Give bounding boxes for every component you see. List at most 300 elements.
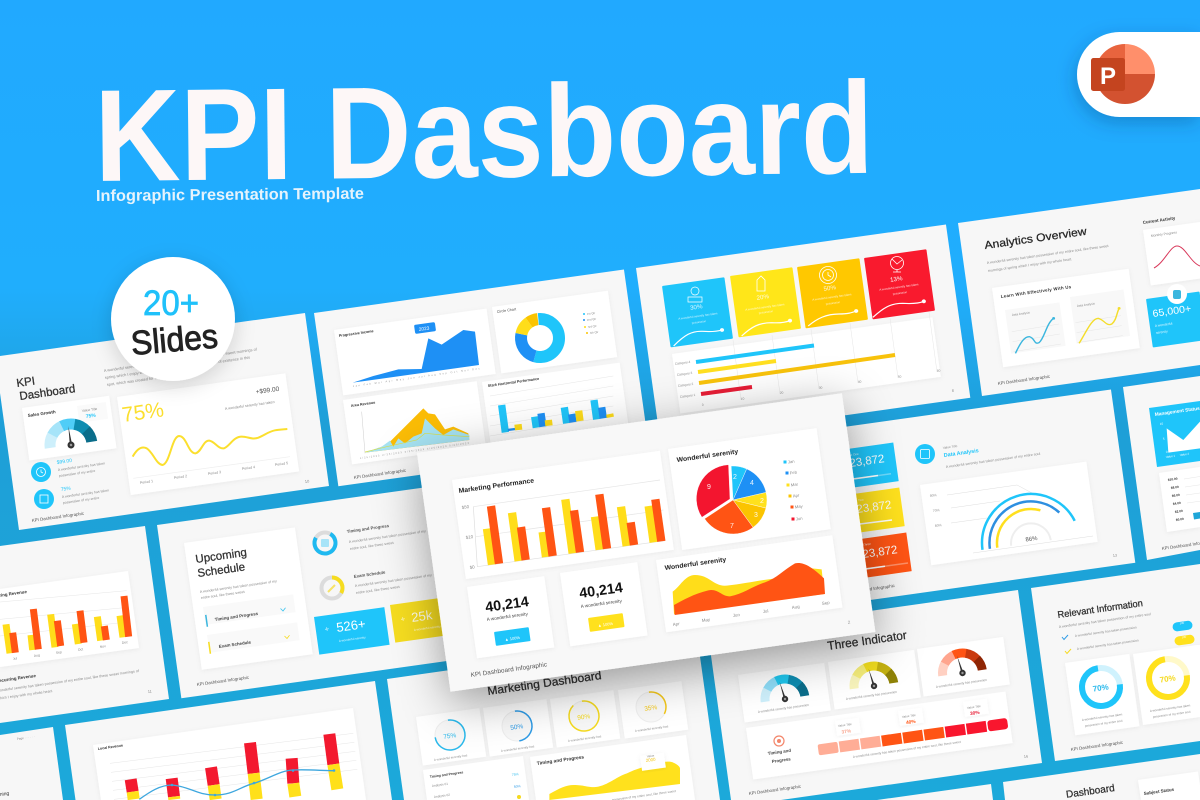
card: 13%: A wonderful serenity has taken: [879, 282, 919, 292]
slide: lower partial right: Subject Status: [1143, 787, 1175, 796]
panel: bar list: $2.00: [1175, 509, 1183, 514]
card: 65,000+: [1146, 284, 1200, 348]
card: 50%: possession: [825, 300, 841, 306]
card: 526+: [314, 607, 390, 655]
kpi ring 50%: A wonderful serenity has: [501, 744, 535, 753]
panel: sales growth: Sales Growth: [27, 409, 56, 418]
panel: progress table: Timing and Progress: [430, 770, 464, 779]
panel: schedule list: Schedule: [197, 561, 246, 580]
stat card: yellow: ▲ 100%: [597, 621, 614, 628]
slide: main marketing performance: [417, 393, 875, 692]
panel: pie chart: Wonderful serenity: [676, 448, 739, 464]
panel: pie chart: [668, 428, 831, 550]
stat card: yellow: 40,214: [578, 580, 624, 602]
page number: 13: [1113, 553, 1117, 558]
panel: horizontal bar chart: 40: [858, 380, 862, 384]
card: cyan donut: [1065, 654, 1140, 735]
footer: KPI Dashboard Infographic: [196, 675, 250, 687]
legend: [583, 311, 599, 335]
checklist: A wonderful serenity has taken possession: [1075, 625, 1137, 638]
text: $99.00: A wonderful serenity has taken: [58, 461, 105, 472]
text: $99.00: possession of my entire: [59, 469, 96, 478]
panel: horizontal bar chart: Category 3: [677, 371, 693, 377]
kpi ring 75%: A wonderful serenity has: [434, 753, 468, 762]
tooltip: [414, 322, 436, 334]
card: yellow donut: possession of my entire soul: [1153, 710, 1191, 719]
panel: bar list: $0.00: [1176, 517, 1184, 522]
card: 30%: [662, 277, 733, 347]
panel: line chart: 75%: [120, 398, 165, 427]
gauge card: red: [917, 637, 1010, 697]
text: exam schedule: entire soul, like these sweet: [356, 585, 400, 595]
card: 30%: possession: [691, 319, 707, 325]
panel: horizontal bar chart: 0: [702, 403, 704, 407]
panel: horizontal bar chart: 50: [898, 375, 902, 379]
panel: monthly progress: Monthly Progress: [1151, 230, 1178, 238]
card: cyan 23,872: [819, 443, 899, 492]
card: 50%: [797, 258, 868, 328]
panel: segmented progress: Timing and: [767, 748, 792, 756]
page number: 10: [304, 478, 310, 484]
callout: 30%: [963, 699, 989, 717]
gauge card: yellow: [828, 650, 921, 710]
panel: radial chart: 80%: [930, 493, 937, 498]
page number: 16: [1024, 754, 1028, 759]
panel: line chart: Period 2: [174, 474, 187, 480]
slide: upcoming schedule: [157, 481, 491, 698]
slide: local revenue: [65, 681, 392, 800]
page number: 2: [847, 620, 851, 625]
heading: Three Indicator: [826, 628, 908, 653]
icon: clipboard circle: [34, 489, 54, 509]
slide: relevant information: [1031, 564, 1200, 761]
slide: marketing dashboard: [387, 635, 720, 800]
slide: lower left partial: Page · · · · · ·: [17, 735, 35, 741]
panel: cyan area chart: 10: [1160, 422, 1164, 426]
badge: 20+ slides: [111, 257, 235, 381]
panel: cyan area chart: 5: [1163, 437, 1165, 441]
card: 20%: A wonderful serenity has taken: [745, 302, 785, 312]
panel: pie chart: 4: [750, 480, 754, 487]
card: cyan donut: possession of my entire soul: [1085, 719, 1123, 728]
panel: schedule list: Upcoming: [195, 547, 248, 566]
panel: area revenue: Area Revenue: [351, 401, 376, 408]
panel: bar chart: Nov: [100, 644, 106, 649]
text: $99.00: $99.00: [56, 458, 73, 466]
stat card: cyan: ▲ 100%: [504, 635, 521, 642]
panel: radial chart: 86%: [1025, 536, 1039, 544]
area chart: [353, 330, 479, 383]
panel: bar chart: Aug: [34, 653, 40, 658]
panel: area chart: Apr: [672, 621, 680, 627]
heading: KPI Dashboard: KPI: [16, 376, 36, 390]
footer: KPI Dashboard Infographic: [470, 661, 548, 679]
panel: bar chart: Sep: [56, 650, 62, 655]
text: $99.00: [56, 458, 105, 478]
text: data analysis: Value Title: [943, 444, 958, 450]
description text: spot, which was created for the bliss of souls like mine.: [106, 369, 201, 387]
legend: May: [794, 503, 804, 509]
panel: schedule list: Exam Schedule: [218, 639, 252, 649]
card: 30%: 30%: [690, 303, 703, 312]
stacked areas: [673, 563, 825, 615]
panel: pie chart: 9: [707, 484, 711, 491]
card: 65,000+: A wonderful: [1155, 322, 1173, 328]
slide: lower partial right: [1003, 754, 1200, 800]
legend: Apr: [792, 493, 800, 498]
text: 75%: 75%: [60, 486, 72, 493]
panel: area revenue: 1/25/2023 2/25/2023 3/25/2023 4/25/2023 5/25/2023: [360, 442, 470, 460]
card: 20%: [730, 267, 801, 337]
slide: colored KPI cards: [636, 224, 970, 441]
panel: line chart: Period 4: [242, 465, 255, 471]
footer: KPI Dashboard Infographic: [748, 784, 802, 796]
panel: stacked bar chart: [93, 708, 366, 800]
card: yellow donut: [1133, 645, 1200, 725]
panel: sales growth: Value Title: [82, 407, 98, 413]
stacked area chart: [362, 408, 469, 453]
panel: bar list: $6.00: [1172, 493, 1180, 498]
kpi ring 90%: [550, 690, 620, 748]
card: 526+: A wonderful serenity: [339, 635, 366, 643]
callout: 37%: 37%: [841, 728, 852, 736]
panel: horizontal bar chart: Category 2: [678, 382, 694, 388]
badge: 20+ slides: 20+: [143, 284, 199, 323]
description text: [103, 346, 258, 387]
pill: yellow: 100: [1181, 635, 1187, 639]
panel: segmented progress: Progress: [771, 756, 792, 764]
legend: Jun: [795, 516, 803, 521]
legend: 2nd Qtr: [587, 317, 596, 322]
gauge card: blue: A wonderful serenity has possession: [758, 703, 809, 714]
panel: horizontal bar chart: 20: [780, 391, 784, 395]
legend: [784, 459, 804, 521]
card: cyan 23,872: Value One: [845, 452, 859, 458]
text: data analysis: Data Analysis: [943, 448, 979, 459]
panel: line chart: +$99.00: [255, 386, 280, 396]
panel: sales growth: 75%: [85, 413, 97, 420]
pill: cyan: 100: [1179, 621, 1185, 625]
description text: spring which I enjoy with my whole heart. I am alone, in the charm of existence in this: [104, 355, 250, 380]
panel: line chart: Period 5: [275, 461, 288, 467]
panel: cyan area chart: Management Status: [1154, 406, 1200, 418]
legend: 1st Qtr: [587, 311, 596, 316]
kpi ring 50%: [483, 699, 553, 757]
panel: learn with us: Data Analysis: [1012, 310, 1031, 317]
card: 25k: +: [400, 614, 406, 624]
panel: horizontal bar chart: Category 4: [675, 360, 691, 366]
footer: KPI Dashboard Infographic: [31, 511, 85, 523]
subtitle: Infographic Presentation Template: [96, 186, 364, 205]
panel: pie chart: 3: [754, 512, 758, 519]
page number: 8: [952, 389, 954, 393]
pill: cyan: [1172, 620, 1193, 632]
badge: 20+ slides: Slides: [129, 318, 219, 363]
card: 526+: 526+: [335, 616, 366, 635]
slide: data analysis: [801, 389, 1135, 606]
card: 25k: 25k: [410, 607, 434, 625]
panel: bar chart: Dec: [122, 640, 128, 645]
panel: line chart: Period 1: [140, 479, 153, 485]
legend: Mar: [790, 481, 799, 487]
panel: learn with us: Data Analysis: [1077, 301, 1096, 308]
card: 50%: A wonderful serenity has taken: [812, 292, 852, 302]
text: 75%: possession of my entire: [63, 496, 100, 505]
footer: KPI Dashboard Infographic: [997, 374, 1051, 386]
powerpoint badge: [1077, 32, 1200, 117]
panel: pie chart: 7: [730, 523, 734, 530]
card: yellow 23,872: [825, 488, 905, 537]
panel: area chart: Aug: [791, 604, 800, 610]
callout: 40%: [898, 708, 924, 726]
checklist: [1062, 625, 1139, 654]
callout: 37%: [835, 718, 861, 736]
callout: 40%: Value Title: [902, 713, 916, 719]
legend: 3rd Qtr: [588, 324, 597, 329]
heading: Marketing Dashboard: [487, 670, 602, 698]
card: cyan 23,872: 23,872: [849, 453, 885, 470]
panel: schedule list: [184, 527, 313, 670]
panel: progress table: [423, 756, 529, 800]
checklist: A wonderful serenity has taken possession: [1077, 638, 1139, 651]
panel: progressive income: [334, 309, 496, 395]
pill: yellow: [1174, 634, 1195, 646]
gauge: [47, 421, 92, 451]
panel: schedule list: Timing and Progress: [214, 611, 259, 622]
panel: schedule list: A wonderful serenity has taken possession of my: [200, 579, 277, 594]
card: orange 23,872: 23,872: [862, 544, 898, 561]
panel: bar chart: [0, 571, 139, 667]
panel: marketing performance: $0: [469, 564, 476, 570]
panel: area chart: Jul: [762, 608, 769, 614]
card: 50%: 50%: [823, 284, 837, 293]
heading: KPI Dashboard: Dashboard: [19, 383, 76, 403]
panel: marketing performance: [452, 451, 674, 579]
card: 25k: [390, 595, 466, 643]
text: data analysis: A wonderful serenity has taken possession of my entire soul: [946, 452, 1041, 469]
kpi ring 50%: 50%: [510, 723, 524, 732]
panel: area chart: [656, 535, 842, 632]
kpi ring 35%: [618, 681, 688, 739]
bar chart: [490, 376, 613, 436]
description: A wonderful serenity has taken possession of my entire soul, like these sweet: [987, 244, 1109, 265]
heading: Analytics Overview: [984, 226, 1087, 252]
stat card: yellow: A wonderful serenity: [580, 598, 623, 609]
panel: cyan area chart: Value 2: [1180, 452, 1190, 457]
panel: cyan area chart: [1149, 401, 1200, 467]
card: 526+: +: [324, 624, 330, 634]
panel: pie chart: 2: [733, 474, 737, 481]
text: timing and progress: [346, 523, 426, 551]
panel: bar list: [1159, 467, 1200, 532]
slide: analytics overview: [958, 189, 1200, 396]
panel: sales growth: [22, 396, 117, 460]
text: exam schedule: Exam Schedule: [353, 570, 386, 579]
segments: [818, 718, 1008, 755]
panel: bar list: $4.00: [1173, 501, 1181, 506]
card: 13%: 13%: [890, 275, 903, 284]
kpi ring 90%: A wonderful serenity has: [568, 734, 602, 743]
panel: bar list: $10.00: [1168, 477, 1178, 482]
panel: horizontal bar chart: Category 1: [680, 393, 696, 399]
panel: progress table: Analysis 01: [432, 782, 449, 788]
slide: management status: [1123, 376, 1200, 560]
panel: progressive income: Jan Feb Mar Apr May Jun Jul Aug Sep Oct Nov Dec: [353, 367, 481, 388]
panel: line chart: [117, 373, 299, 495]
card: orange 23,872: [832, 533, 912, 582]
donut: timing and progress: [311, 529, 339, 557]
gauge card: blue: [738, 663, 831, 723]
stat card: cyan: 40,214: [484, 594, 530, 616]
card: 13%: possession: [892, 290, 908, 296]
stat card: yellow: [560, 562, 648, 646]
panel: circle chart: Circle Chart: [497, 307, 516, 314]
line: yellow trend: [133, 429, 287, 465]
card: yellow donut: A wonderful serenity has taken: [1150, 703, 1191, 713]
legend: Jan: [787, 459, 795, 464]
panel: stark horizontal performance: Stark Horizontal Performance: [488, 377, 539, 388]
icon: calendar circle: [915, 444, 935, 464]
panel: radial chart: 60%: [935, 523, 942, 528]
panel: area chart: Jun: [732, 612, 741, 618]
text: 75%: [60, 486, 109, 505]
powerpoint badge: P: [1100, 63, 1116, 90]
card: 13%: [864, 249, 935, 319]
kpi ring 90%: 90%: [577, 713, 591, 722]
tooltip: 2023: [418, 326, 430, 333]
mini line charts: [1012, 307, 1123, 353]
panel: area revenue: [343, 381, 486, 464]
heading: current activity: Current Activity: [1142, 215, 1176, 225]
footer: KPI Dashboard Infographic: [353, 468, 407, 480]
description: A wonderful serenity has taken possession of my entire soul: [1059, 612, 1151, 629]
card: 30%: A wonderful serenity has taken: [678, 311, 718, 321]
heading: Relevant Information: [1057, 598, 1144, 621]
bar chart: [473, 480, 665, 567]
callout: 30%: 30%: [970, 710, 981, 717]
card: yellow 23,872: 23,872: [856, 499, 892, 516]
card: 65,000+: 65,000+: [1152, 304, 1192, 320]
stat card: cyan: [467, 576, 554, 658]
panel: progress table: 50%: [514, 784, 521, 789]
card: cyan donut: 70%: [1092, 682, 1109, 694]
panel: segmented progress: [746, 692, 1013, 779]
panel: schedule list: entire soul, like these sweet: [201, 590, 245, 600]
icon: target: [774, 736, 784, 746]
panel: area chart: May: [701, 617, 711, 623]
text: exam schedule: A wonderful serenity has taken possession of my: [355, 573, 432, 588]
panel: line chart: Period 3: [208, 470, 221, 476]
panel: area chart: Sep: [821, 600, 830, 606]
text: timing and progress: A wonderful serenity has taken possession of my: [349, 529, 426, 544]
panel: horizontal bar chart: 60: [937, 369, 941, 373]
panel: stacked bar chart: Local Revenue: [98, 743, 123, 751]
callout: 37%: Value Title: [838, 722, 852, 728]
legend: 4th Qtr: [590, 330, 599, 335]
panel: marketing performance: Marketing Performance: [458, 477, 535, 495]
donut chart: [519, 317, 561, 359]
text: timing and progress: entire soul, like these sweet: [350, 541, 394, 551]
panel: timing area chart: 2000: [645, 757, 656, 763]
gauge card: red: A wonderful serenity has possession: [936, 678, 987, 689]
panel: learn with us: Learn With Effectively With Us: [1000, 284, 1072, 299]
panel: area chart: Wonderful serenity: [664, 556, 727, 572]
panel: circle chart: [492, 291, 617, 373]
text: exam schedule: [353, 570, 432, 595]
text: data analysis: [943, 444, 1041, 469]
panel: radial chart: 70%: [933, 508, 940, 513]
slide: three indicator: [708, 590, 1042, 800]
panel: horizontal bar chart: 10: [741, 397, 745, 401]
panel: monthly progress: [1143, 221, 1200, 285]
kpi ring 75%: [416, 708, 486, 766]
sparklines: [674, 300, 925, 346]
slide: KPI dashboard: [0, 313, 329, 530]
callout: 30%: Value Title: [967, 704, 981, 710]
page number: 11: [148, 689, 152, 694]
panel: line chart: A wonderful serenity has taken: [225, 400, 275, 411]
panel: segmented progress: A wonderful serenity has taken possession of my entire soul, like these sweet: [853, 740, 961, 759]
donut: exam schedule: [322, 578, 342, 598]
icon: clock circle: [31, 462, 51, 482]
panel: learn with us: [992, 269, 1140, 367]
card: 20%: 20%: [756, 293, 770, 302]
text: 75%: A wonderful serenity has taken: [62, 488, 109, 499]
panel: radial chart: [920, 462, 1098, 565]
panel: bar chart: Jul: [13, 656, 18, 661]
callout: 40%: 40%: [906, 719, 917, 726]
slide: lower partial middle: [877, 784, 993, 800]
panel: progress table: 75%: [512, 772, 519, 777]
kpi ring 75%: 75%: [443, 732, 457, 741]
card: 25k: A wonderful serenity: [414, 624, 441, 632]
line: trend: [139, 770, 334, 799]
kpi ring 35%: 35%: [644, 704, 658, 713]
slide: charts overview: [314, 269, 648, 486]
description: mornings of spring which I enjoy with my whole heart.: [988, 257, 1072, 273]
panel: progressive income: Progressive Income: [339, 329, 374, 338]
panel: timing area chart: Timing and Progress: [536, 754, 585, 767]
card: 65,000+: serenity: [1156, 329, 1168, 335]
gauge card: yellow: A wonderful serenity has possession: [846, 690, 897, 701]
legend: Feb: [789, 469, 798, 475]
panel: timing area chart: Value: [647, 753, 655, 758]
panel: pie chart: 2: [760, 498, 764, 505]
panel: horizontal bar chart: 30: [819, 386, 823, 390]
card: orange 23,872: Value Three: [855, 542, 871, 548]
stat card: cyan: A wonderful serenity: [486, 611, 529, 622]
pie: [696, 465, 767, 534]
slide: lower left partial: [0, 727, 63, 800]
footer: KPI Dashboard Infographic: [1070, 740, 1124, 752]
slide: recurring revenue: [0, 526, 169, 723]
panel: horizontal bar chart: [672, 312, 941, 413]
panel: cyan area chart: 0: [1166, 450, 1168, 454]
panel: progress table: Analysis 02: [434, 793, 451, 799]
heading: KPI Dashboard: [16, 376, 76, 403]
arcs: [982, 494, 1075, 550]
panel: stark horizontal performance: [482, 363, 629, 446]
card: cyan donut: A wonderful serenity has taken: [1082, 712, 1123, 722]
panel: timing area chart: [530, 735, 695, 800]
panel: marketing performance: $50: [461, 504, 470, 510]
panel: bar chart: Oct: [78, 647, 83, 652]
title: KPI Dasboard: [94, 54, 874, 209]
description text: A wonderful serenity has taken possession of my entire soul, like these sweet mornings of: [103, 346, 258, 373]
kpi ring 35%: A wonderful serenity has: [635, 724, 669, 733]
panel: bar list: $8.00: [1171, 485, 1179, 490]
card: 20%: possession: [758, 309, 774, 315]
